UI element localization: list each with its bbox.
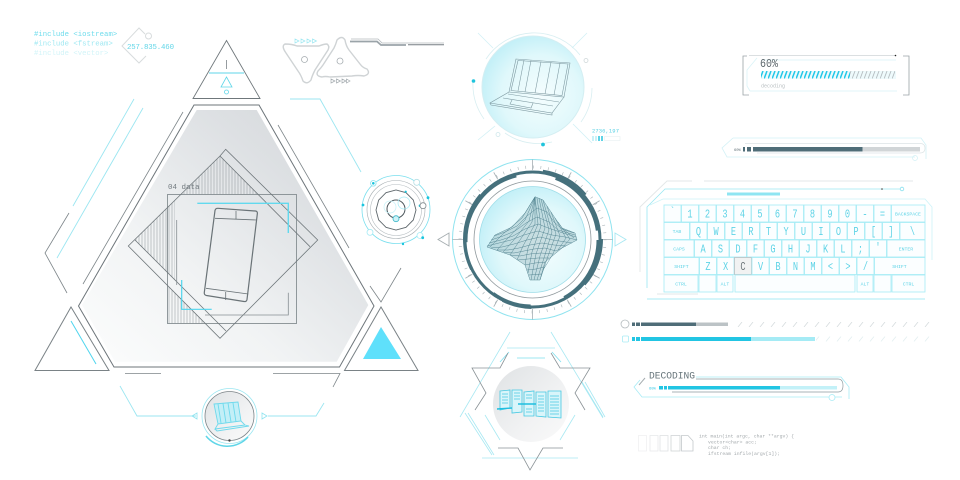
keys row 5: ALT [861,282,869,288]
diamond id badge [122,28,174,63]
laptop line art [490,59,570,115]
keys row 2: O [836,226,841,240]
code include text: #include <iostream> [34,31,117,39]
keys row 1: 4 [740,208,745,222]
keys row 1: 9 [827,208,833,222]
phone [204,208,257,302]
central mountain dial [438,160,626,320]
gradient fill [82,110,368,362]
keys row 2: E [731,226,736,240]
keys row 1: 2 [705,208,710,222]
bottom laptop badge [192,388,267,446]
hexagram server emblem [460,332,605,470]
server racks [497,390,561,418]
orbit widget [362,176,430,245]
cyan slider [622,336,932,342]
keys row 1: 1 [687,208,693,222]
keys row 4 [664,258,925,275]
keys row 5 [664,275,925,292]
file icons [638,436,693,451]
keys row 3: ENTER [899,246,913,252]
cyan corner brackets [197,203,288,233]
keys row 2: R [748,226,754,240]
keys row 2: ] [888,226,894,240]
60% pill progress [722,138,926,160]
hatched regions [182,156,258,194]
decoding pill: DECODING [649,370,695,382]
right small triangle [344,307,418,370]
60% decoding progress: 60% [760,57,779,71]
keys row 1: 3 [722,208,728,222]
60% pill progress: 60% [734,149,742,153]
keys row 2: \ [910,226,915,240]
code snippet: ifstream infile(argv[1]); [708,451,780,457]
keys row 4: SHIFT [674,264,689,270]
keys row 2: I [818,226,824,240]
wireframe mountain [487,197,577,280]
coordinate readout [592,128,620,141]
keys row 3: D [735,243,741,257]
keys row 4: X [723,261,729,275]
keys row 1: - [862,208,868,222]
keys row 2: Q [696,226,701,240]
top small triangle [193,40,260,98]
code snippet [699,434,794,457]
keyboard frame [640,181,913,272]
left small triangle [35,307,109,370]
60% decoding progress: decoding [761,84,785,90]
square frame [168,194,296,324]
keys row 4: SHIFT [892,264,907,270]
keys row 4: B [775,261,781,275]
keys row 3 [664,240,925,257]
twin triangle connectors [283,38,444,83]
label 04 data: 04 data [168,184,200,192]
dark slider [621,320,932,328]
keys row 3: S [718,243,723,257]
keys row 4: N [793,261,798,275]
keys row 3: K [823,243,829,257]
keys row 4: M [810,261,816,275]
arrow chevrons [295,39,316,43]
gray star lines [472,353,590,470]
code include text: #include <fstream> [34,40,113,48]
keys row 2: P [853,226,859,240]
keys row 5: CTRL [903,282,914,288]
keys row 4: > [845,261,851,275]
keys row 4: < [828,261,833,275]
outer gray side lines [45,112,401,387]
keys row 1 [664,205,925,222]
keys row 2: W [714,226,719,240]
keys row 3: CAPS [673,246,685,252]
decoding pill: 60% [649,388,657,392]
top laptop circle [472,33,592,146]
keys row 1: BACKSPACE [895,212,921,218]
keys row 3: F [753,243,758,257]
keys row 1: ` [670,205,675,220]
keys row 3: ; [858,243,863,257]
keys row 1: 8 [810,208,815,222]
keys row 1: 5 [757,208,763,222]
60% decoding progress [743,55,909,95]
code snippet: char ch; [708,445,731,451]
dial ticks [452,160,612,320]
keys row 5: ALT [721,282,729,288]
keys row 4: C [740,261,746,275]
code snippet: vector<char> acc; [708,440,757,446]
dial side arrows [438,233,449,246]
keys row 4: / [863,261,868,275]
code include text: #include <vector> [34,50,108,58]
keys row 3: A [701,243,706,257]
keyboard panel [640,181,932,299]
coordinate readout: 2736,197 [592,128,619,134]
decoding pill [634,370,849,400]
data trace bars [351,39,444,43]
keys row 1: 0 [845,208,850,222]
keys row 5: CTRL [675,282,687,288]
keys row 3: G [770,243,776,257]
keys row 2: TAB [673,229,681,235]
gray brackets [177,220,288,315]
keys row 4: V [758,261,764,275]
keys row 3: L [840,243,846,257]
rotated square [128,149,318,338]
cyan side lines [57,99,361,416]
keys row 3: H [788,243,793,257]
keys row 4: Z [705,261,711,275]
keys row 3: J [805,243,811,257]
cyan hex lines [460,332,605,458]
keys row 2: Y [784,226,789,240]
main hexagon panel [78,105,374,367]
keys row 1: 6 [775,208,780,222]
laptop icon [214,402,249,431]
keys row 1: = [880,208,885,222]
diamond id badge: 257.835.460 [127,44,174,52]
keys row 1: 7 [792,208,798,222]
keys row 3: ' [875,242,881,256]
keys row 2: U [801,226,806,240]
code include text [34,31,117,58]
code snippet: int main(int argc, char **argv) { [699,434,794,440]
dark broken ring [464,170,602,308]
keys row 2: T [766,226,771,240]
keys row 2 [664,222,925,240]
outline [78,105,374,367]
keys row 2: [ [871,226,876,240]
